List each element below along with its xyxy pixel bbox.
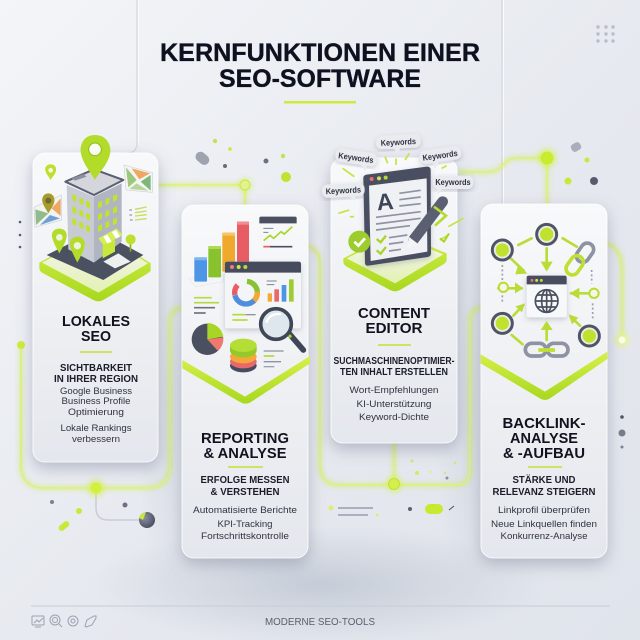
icon: dot grid (596, 25, 615, 43)
feature list (350, 385, 438, 423)
callouts: keyword bubbles (322, 134, 473, 203)
heading: EDITOR (366, 320, 423, 337)
subheading (54, 363, 138, 385)
feature list: Konkurrenz-Analyse (500, 531, 588, 542)
feature list: Business Profile (62, 396, 130, 407)
panel: lokales seo (33, 135, 158, 462)
subheading (200, 475, 290, 498)
footer: MODERNE SEO-TOOLS (265, 617, 375, 628)
icon: document with keywords and pencil: A (376, 188, 395, 215)
panel: reporting und analyse (182, 205, 310, 558)
feature list: Keyword-Dichte (359, 412, 429, 423)
feature list (491, 505, 597, 542)
feature list: Google Business (60, 386, 132, 397)
heading: SEO (81, 328, 111, 345)
subheading: IN IHRER REGION (54, 374, 138, 385)
feature list: Optimierung (68, 407, 124, 418)
icon: document with keywords and pencil (322, 134, 473, 291)
heading: LOKALES (62, 313, 130, 330)
subheading: ERFOLGE MESSEN (200, 475, 290, 486)
callouts: keyword bubbles: Keywords (435, 177, 471, 187)
heading: CONTENT (358, 305, 430, 322)
feature list: Linkprofil überprüfen (498, 505, 590, 516)
icon: charts and magnifier (182, 217, 310, 404)
callouts: keyword bubbles: Keywords (380, 136, 417, 148)
subheading: RELEVANZ STEIGERN (492, 487, 596, 498)
heading (201, 430, 289, 462)
lower decoration: lines, pill and check (328, 504, 454, 516)
feature list: Automatisierte Berichte (193, 505, 297, 516)
heading: REPORTING (201, 430, 289, 447)
icon: connector ball (139, 512, 155, 528)
heading: BACKLINK- (502, 415, 586, 432)
subheading: SUCHMASCHINENOPTIMIER- (334, 356, 454, 367)
title: KERNFUNKTIONEN EINER (160, 39, 480, 67)
feature list: KI-Unterstützung (356, 399, 432, 410)
panel: content editor (322, 134, 473, 443)
subheading: STÄRKE UND (512, 473, 576, 486)
footer (31, 606, 610, 628)
heading: ANALYSE (510, 430, 578, 447)
green connector lines (21, 158, 622, 520)
heading: & ANALYSE (204, 445, 286, 462)
callouts: keyword bubbles: Keywords (325, 184, 362, 196)
callouts: keyword bubbles: Keywords (422, 148, 459, 163)
feature list: verbessern (72, 434, 120, 445)
subheading: SICHTBARKEIT (60, 363, 132, 374)
icon: link network around website (481, 224, 607, 400)
feature list: KPI-Tracking (218, 519, 272, 530)
subheading (334, 356, 454, 378)
feature list (60, 386, 132, 445)
callouts: keyword bubbles: Keywords (338, 150, 374, 165)
feature list: Lokale Rankings (60, 423, 132, 434)
subheading: & VERSTEHEN (210, 487, 280, 498)
heading (502, 415, 586, 462)
feature list: Neue Linkquellen finden (491, 519, 597, 530)
heading: & -AUFBAU (503, 445, 585, 462)
heading (358, 305, 430, 337)
subheading (492, 473, 596, 498)
icon: building with location pins (34, 135, 152, 301)
feature list (193, 505, 297, 542)
feature list: Wort-Empfehlungen (350, 385, 438, 396)
connector nodes and floating dots (17, 139, 629, 532)
footer icons: monitor, search, gear, rocket (32, 615, 96, 627)
feature list: Fortschrittskontrolle (201, 531, 289, 542)
title (160, 39, 480, 104)
subheading: TEN INHALT ERSTELLEN (340, 367, 448, 378)
heading (62, 313, 130, 345)
panel: backlink-analyse (481, 204, 607, 558)
title: SEO-SOFTWARE (219, 65, 421, 93)
